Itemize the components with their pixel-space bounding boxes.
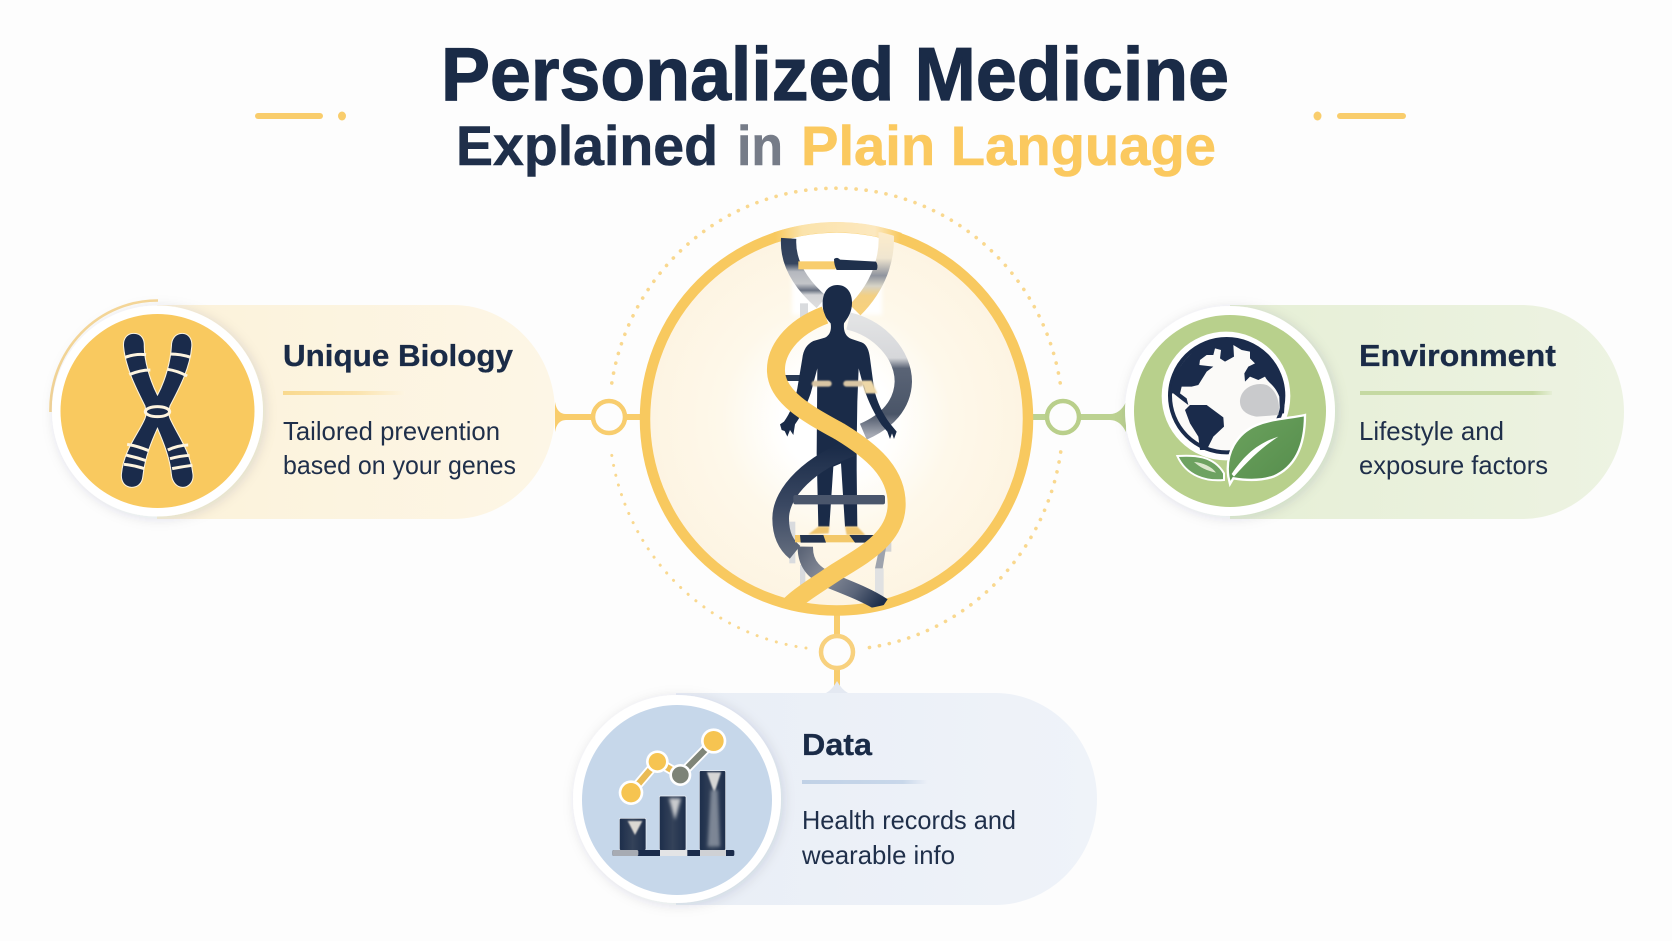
DNA helix and figure bbox=[776, 232, 903, 606]
pale helix supports bbox=[789, 303, 891, 597]
icon badge bbox=[1125, 306, 1335, 516]
description: exposure factors bbox=[1359, 450, 1548, 480]
central hub: person inside DNA helix bbox=[644, 225, 1028, 611]
chromosome bands bbox=[124, 354, 192, 469]
hub disc bbox=[644, 227, 1028, 611]
africa bbox=[1240, 384, 1279, 417]
divider bbox=[283, 391, 405, 395]
back strands bbox=[789, 232, 903, 432]
description: Lifestyle and bbox=[1359, 416, 1504, 446]
icon badge bbox=[573, 695, 781, 903]
description: Health records and bbox=[802, 805, 1016, 835]
rung top bbox=[798, 261, 836, 269]
bar highlights bbox=[628, 821, 642, 835]
rung middle left bbox=[786, 375, 800, 381]
icon: globe and leaves bbox=[1162, 332, 1305, 484]
globe bbox=[1162, 332, 1290, 460]
line bbox=[631, 741, 714, 793]
panel: unique biology bbox=[50, 300, 555, 519]
dotted orbit ring bbox=[611, 188, 1061, 648]
panel background bbox=[1230, 305, 1624, 519]
small leaf bbox=[1177, 456, 1224, 480]
title bbox=[441, 32, 1229, 177]
icon: chromosome bbox=[121, 333, 193, 487]
points bbox=[619, 780, 643, 805]
white column behind helix bbox=[792, 225, 882, 315]
divider bbox=[1360, 391, 1552, 395]
description: wearable info bbox=[801, 840, 955, 870]
connector bottom bbox=[821, 615, 853, 693]
human figure bbox=[780, 285, 897, 527]
title line 2: in: in bbox=[737, 114, 783, 177]
title line 2: Plain Language: Plain Language bbox=[801, 114, 1216, 177]
title line 1: Personalized Medicine bbox=[441, 32, 1229, 116]
divider bbox=[802, 780, 928, 784]
south america bbox=[1185, 405, 1224, 450]
front yellow strand bbox=[776, 315, 897, 605]
panel: environment bbox=[1125, 305, 1624, 519]
panel background bbox=[157, 305, 555, 519]
heading: Unique Biology bbox=[283, 338, 514, 373]
description: based on your genes bbox=[283, 450, 516, 480]
bars bbox=[619, 818, 646, 850]
bottom rung bbox=[795, 535, 855, 542]
icon: rising bar and line chart bbox=[612, 728, 734, 856]
title line 2: Explained: Explained bbox=[456, 114, 718, 177]
connector left bbox=[555, 401, 640, 433]
lower crossing strand bbox=[805, 547, 883, 606]
large leaf bbox=[1228, 415, 1305, 484]
chromosome body bbox=[121, 333, 193, 487]
title accent right bbox=[1314, 112, 1406, 120]
heading: Environment bbox=[1359, 338, 1556, 373]
base bbox=[612, 850, 734, 856]
panel: data bbox=[573, 693, 1097, 905]
accent arc bbox=[50, 300, 158, 412]
northern landmass bbox=[1170, 339, 1285, 413]
panel background bbox=[676, 693, 1097, 905]
title accent left bbox=[255, 112, 346, 120]
heading: Data bbox=[802, 727, 873, 762]
middle rung highlights bbox=[812, 381, 877, 393]
description: Tailored prevention bbox=[283, 416, 500, 446]
connector right bbox=[1033, 401, 1126, 433]
lower dark strand bbox=[781, 448, 853, 552]
lower rung bbox=[793, 495, 885, 504]
feet bbox=[808, 527, 865, 535]
icon badge bbox=[52, 306, 263, 516]
faded top of the ring bbox=[775, 227, 900, 238]
hub ring bbox=[645, 228, 1028, 610]
